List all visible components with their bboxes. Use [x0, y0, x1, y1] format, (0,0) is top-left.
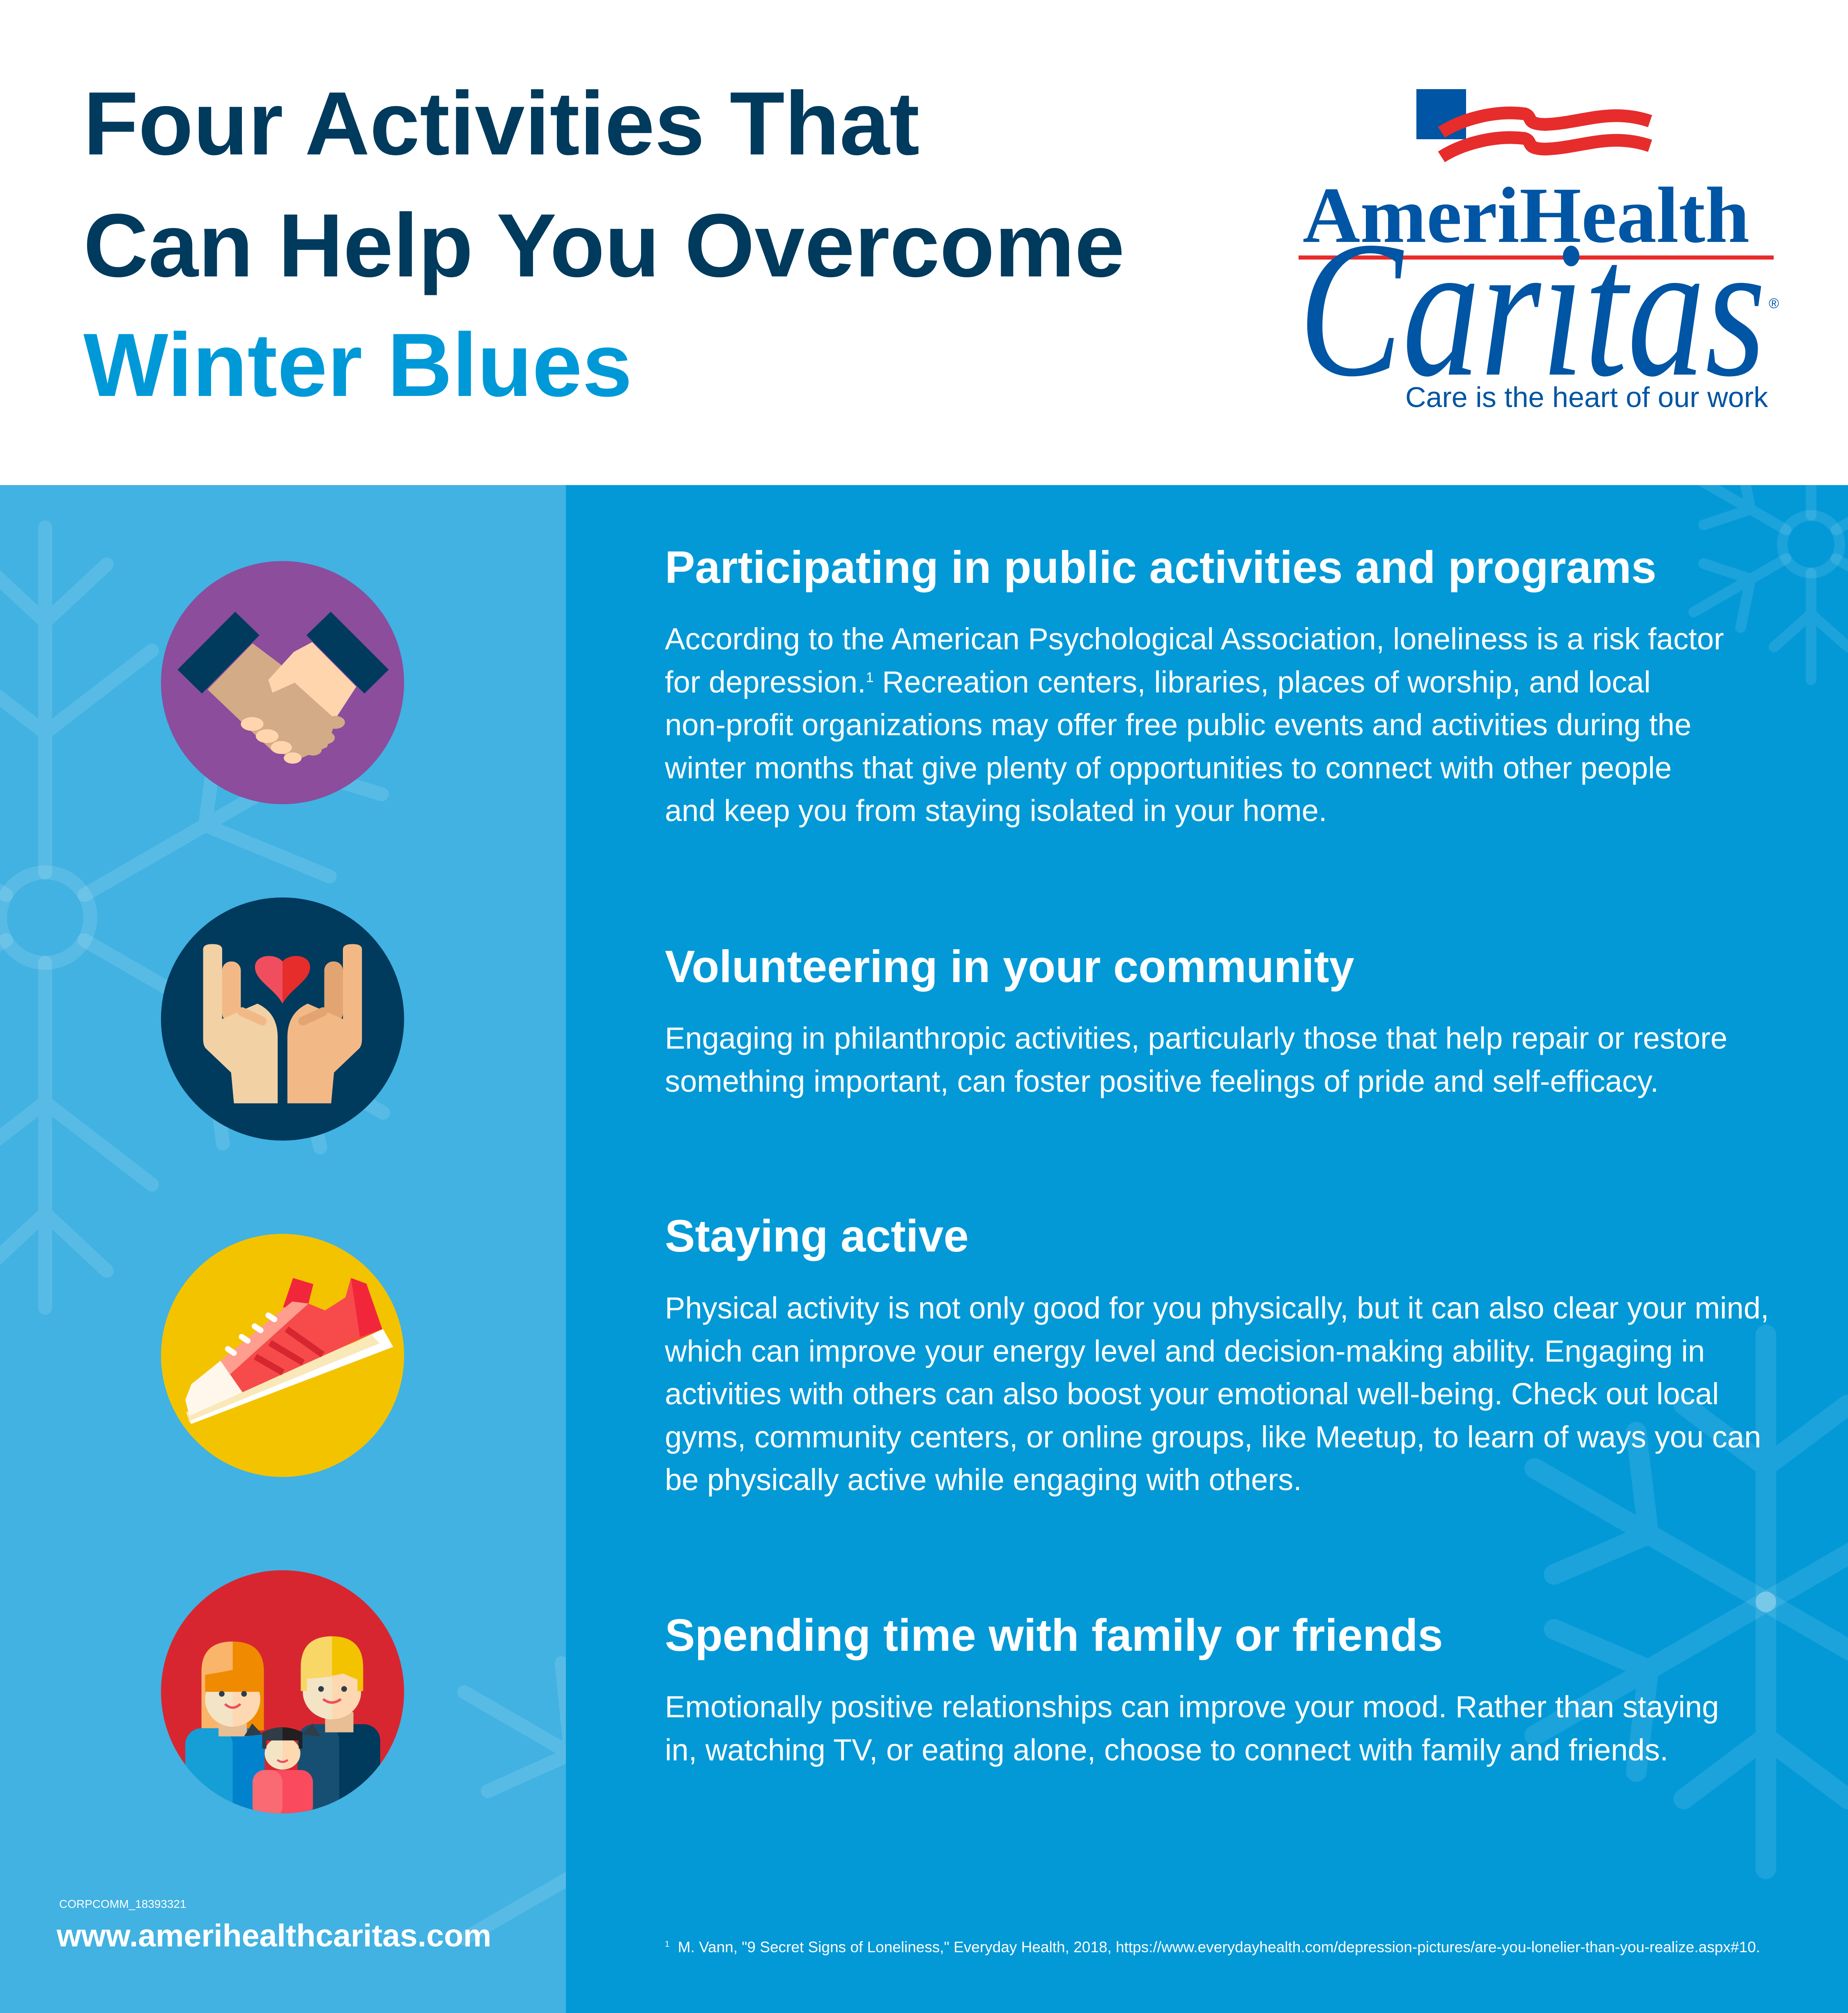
text: [665, 1017, 1727, 1103]
logo script: Caritas: [1299, 201, 1766, 417]
text: in, watching TV, or eating alone, choose to connect with family and friends.: [665, 1732, 1668, 1767]
text: be physically active while engaging with others.: [665, 1463, 1302, 1497]
icon: flag: [0, 0, 1848, 452]
icon: sneaker: [161, 1234, 404, 1477]
footer code: CORPCOMM_18393321: [59, 1898, 186, 1910]
footnote: 1 M. Vann, "9 Secret Signs of Loneliness," Everyday Health, 2018, https://www.everydayhealth.com/depression-pictures/are-you-lonelier-than-you-realize.aspx#10.: [665, 1939, 1760, 1955]
text: [665, 1287, 1769, 1502]
decorative snowflakes: [0, 485, 1848, 2013]
logo: AmeriHealth Caritas: [1294, 86, 1786, 415]
text: Emotionally positive relationships can improve your mood. Rather than staying: [665, 1690, 1719, 1724]
text: Engaging in philanthropic activities, particularly those that help repair or restore: [665, 1021, 1727, 1055]
section 2: volunteering: [665, 944, 1815, 1109]
text: According to the American Psychological Association, loneliness is a risk factor: [665, 622, 1724, 656]
icon: handshake: [161, 561, 404, 804]
header background: [0, 0, 1848, 485]
section 3: staying active: [665, 1214, 1815, 1501]
text: and keep you from staying isolated in your home.: [665, 794, 1327, 828]
title: Four Activities That: [83, 74, 919, 174]
text: [665, 1686, 1719, 1771]
text: non-profit organizations may offer free public events and activities during the: [665, 708, 1692, 742]
logo wordmark: AmeriHealth: [1303, 171, 1749, 259]
heading: Staying active: [665, 1211, 969, 1261]
tagline: Care is the heart of our work: [1405, 381, 1768, 413]
registered mark: ®: [1769, 296, 1779, 311]
title: [0, 0, 1191, 452]
heading: Volunteering in your community: [665, 941, 1354, 992]
title: Winter Blues: [83, 315, 632, 415]
text: [665, 618, 1724, 832]
icon: family: [161, 1570, 404, 1813]
text: winter months that give plenty of opportunities to connect with other people: [665, 751, 1672, 784]
icon: hands with heart: [161, 897, 404, 1141]
text: for depression.1 Recreation centers, libraries, places of worship, and local: [665, 665, 1650, 699]
heading: Spending time with family or friends: [665, 1610, 1443, 1661]
title: Can Help You Overcome: [83, 196, 1125, 296]
text: activities with others can also boost your emotional well-being. Check out local: [665, 1377, 1719, 1411]
text: something important, can foster positive feelings of pride and self-efficacy.: [665, 1064, 1659, 1098]
left panel background: [0, 485, 566, 2013]
section 4: family and friends: [665, 1613, 1815, 1777]
text: which can improve your energy level and decision-making ability. Engaging in: [665, 1334, 1705, 1368]
text: gyms, community centers, or online groups, like Meetup, to learn of ways you can: [665, 1419, 1761, 1454]
section 1: public activities: [665, 545, 1815, 833]
footer url: www.amerihealthcaritas.com: [57, 1918, 491, 1953]
heading: Participating in public activities and programs: [665, 542, 1656, 593]
text: Physical activity is not only good for you physically, but it can also clear your mind,: [665, 1291, 1769, 1325]
right panel background: [566, 485, 1848, 2013]
